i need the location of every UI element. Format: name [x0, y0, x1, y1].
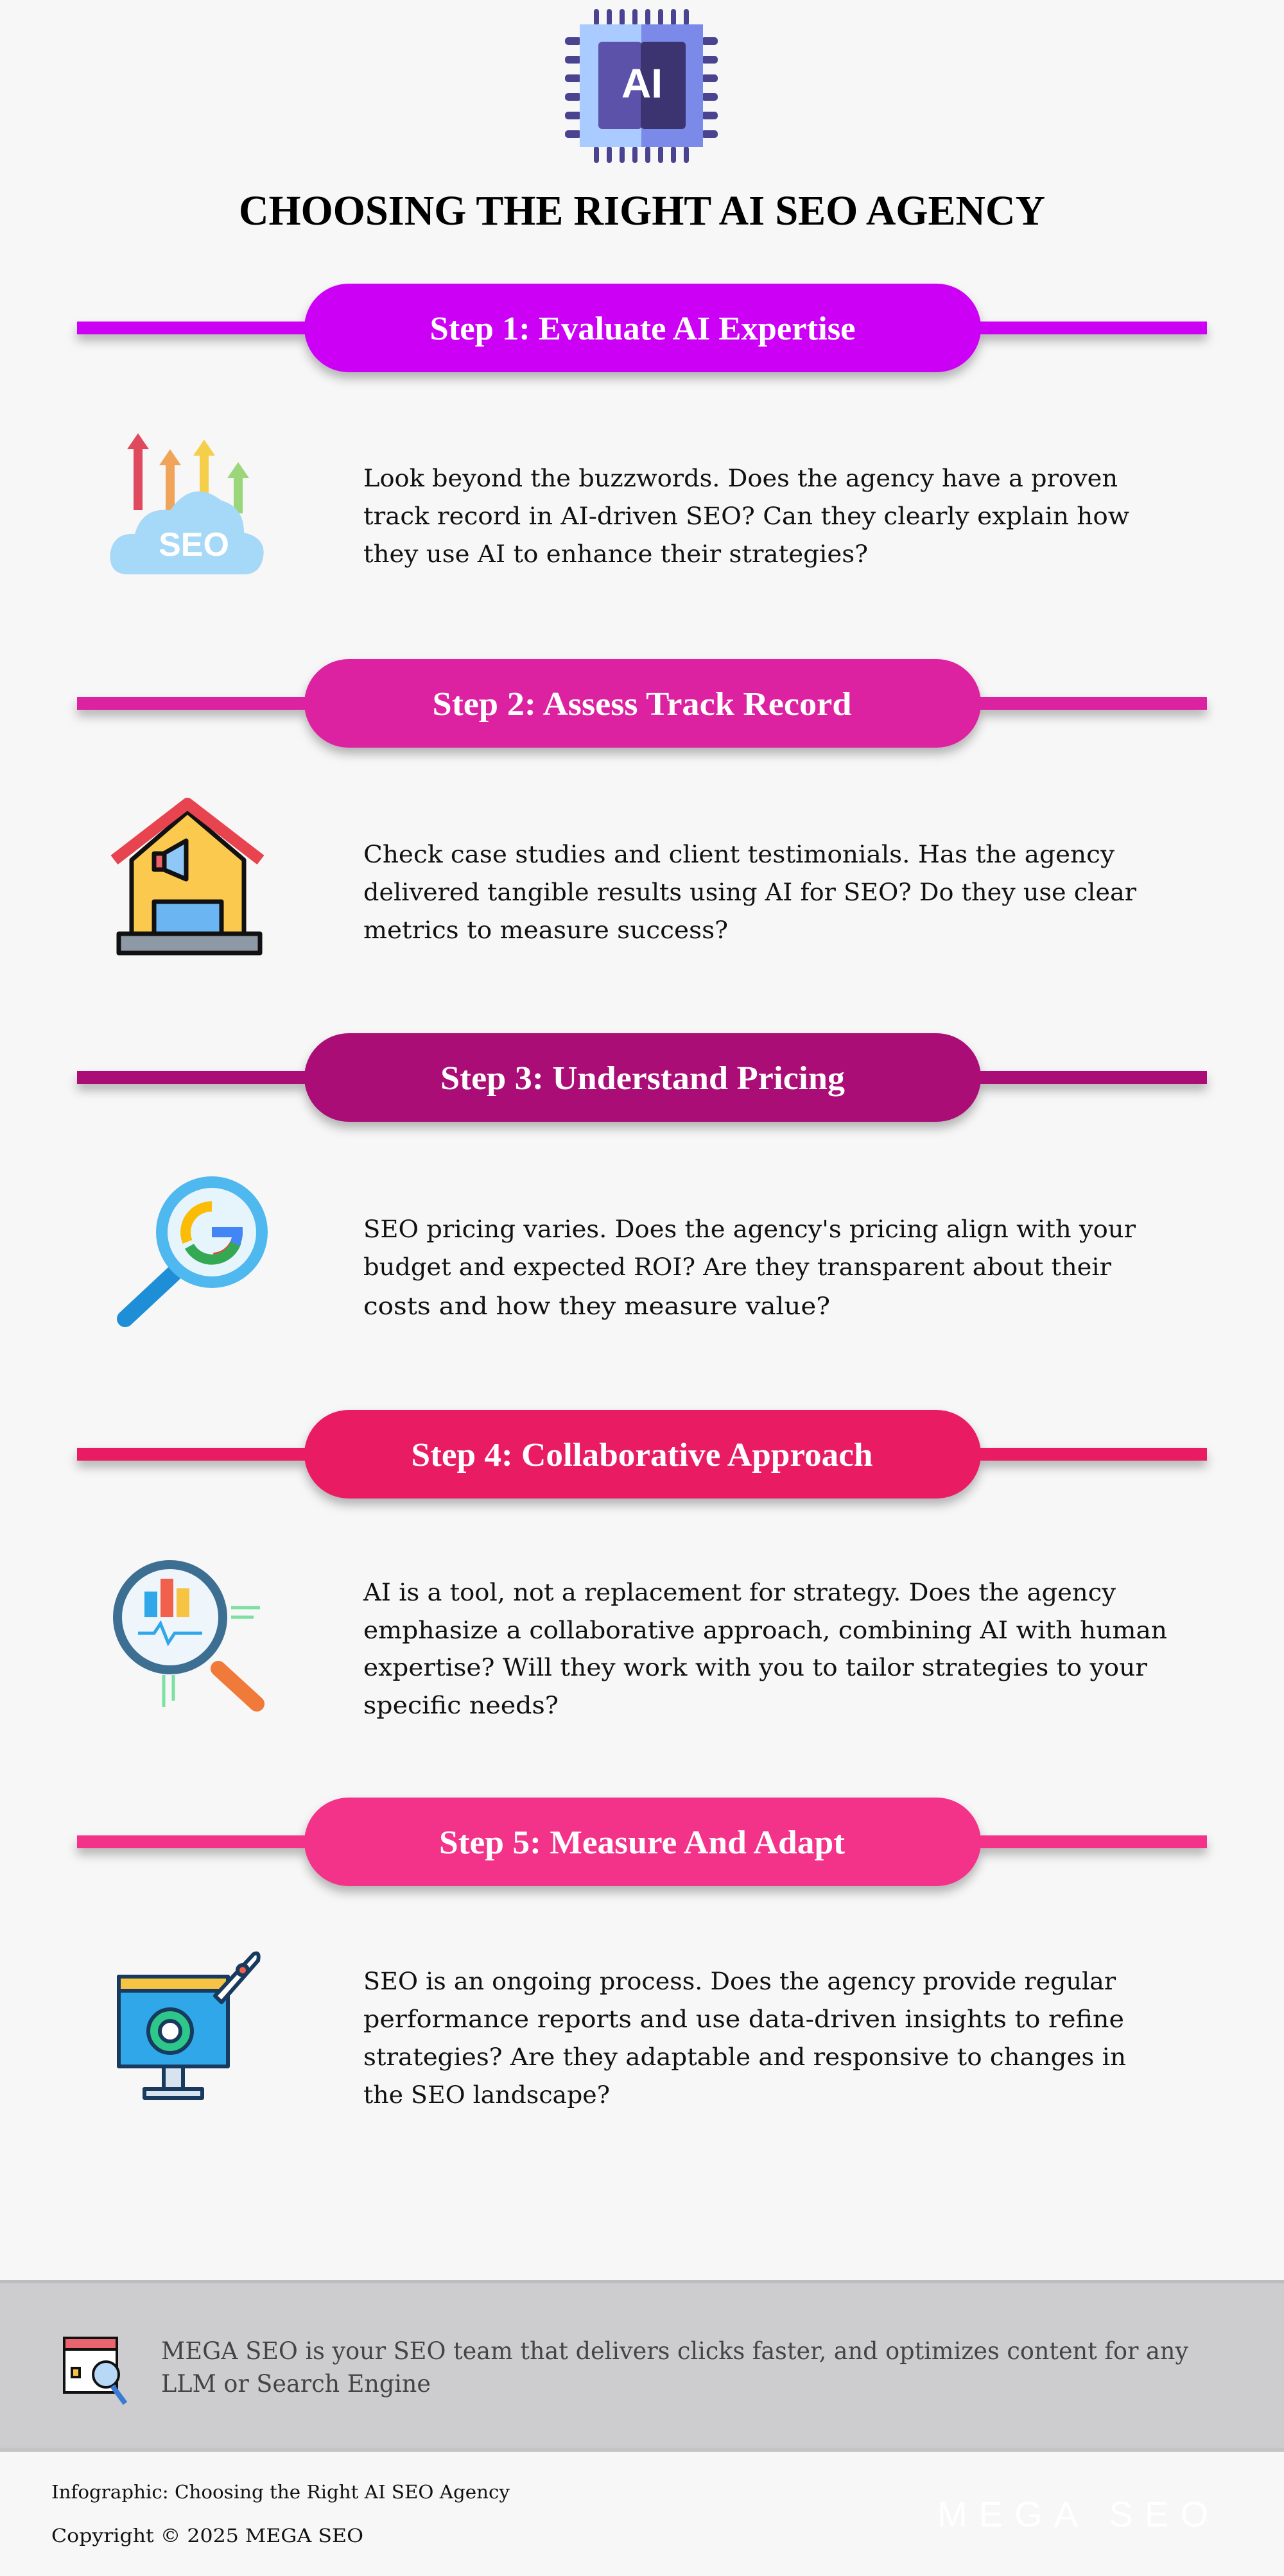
text: step 4: AI is a tool, not a replacement for strategy. Does the agency [363, 1579, 1116, 1606]
text: step 2: Check case studies and client testimonials. Has the agency [363, 841, 1115, 868]
text: step 5: the SEO landscape? [363, 2081, 610, 2109]
text: step 1: Look beyond the buzzwords. Does the agency have a proven [363, 465, 1118, 492]
step 3 header: Step 3: Understand Pricing [440, 1060, 845, 1097]
text: step 4: expertise? Will they work with you to tailor strategies to your [363, 1654, 1147, 1681]
text: step 3 [363, 1215, 1136, 1320]
text: step 2: metrics to measure success? [363, 916, 728, 944]
step 4 header [77, 1410, 1207, 1498]
text: step 3: SEO pricing varies. Does the agency's pricing align with your [363, 1215, 1136, 1243]
text: promo: MEGA SEO is your SEO team that delivers clicks faster, and optimizes content for any [161, 2337, 1188, 2365]
logo: MEGA SEO: MEGA SEO [937, 2494, 1208, 2534]
icon: AI chip: AI [621, 60, 663, 107]
text: step 4: specific needs? [363, 1692, 559, 1719]
step 3 header [77, 1033, 1207, 1122]
icon: SEO cloud: SEO [159, 526, 229, 563]
icon: analytics magnifier [117, 1565, 260, 1707]
text: step 5: performance reports and use data-driven insights to refine [363, 2005, 1124, 2033]
text: step 3: budget and expected ROI? Are they transparent about their [363, 1253, 1111, 1281]
text: step 2 [363, 841, 1136, 944]
footer credits: Infographic: Choosing the Right AI SEO Agency [51, 2481, 510, 2503]
step 5 header: Step 5: Measure And Adapt [439, 1825, 846, 1861]
text: step 1 [363, 465, 1129, 568]
text: promo: LLM or Search Engine [161, 2370, 431, 2398]
footer credits: Copyright © 2025 MEGA SEO [51, 2525, 363, 2546]
title: CHOOSING THE RIGHT AI SEO AGENCY [239, 187, 1045, 234]
text: step 5: SEO is an ongoing process. Does the agency provide regular [363, 1968, 1116, 1995]
icon: magnifier with G [125, 1182, 262, 1319]
step 2 header: Step 2: Assess Track Record [433, 686, 852, 723]
icon: house with megaphone [114, 803, 261, 953]
footer credits [51, 2481, 510, 2546]
text: step 4 [363, 1579, 1167, 1719]
icon: monitor with rocket [119, 1953, 259, 2098]
text: step 5 [363, 1968, 1126, 2109]
text: step 2: delivered tangible results using AI for SEO? Do they use clear [363, 879, 1136, 906]
text: step 4: emphasize a collaborative approach, combining AI with human [363, 1617, 1167, 1644]
icon: AI chip [565, 9, 718, 163]
step 5 header [77, 1798, 1207, 1886]
text: step 1: they use AI to enhance their strategies? [363, 540, 868, 568]
step 1 header [77, 284, 1207, 372]
step 1 header: Step 1: Evaluate AI Expertise [430, 311, 855, 347]
icon: SEO cloud [110, 433, 264, 574]
step 4 header: Step 4: Collaborative Approach [411, 1437, 873, 1473]
icon: browser with key magnifier [64, 2338, 125, 2403]
text: step 3: costs and how they measure value? [363, 1292, 830, 1320]
text: step 1: track record in AI-driven SEO? Can they clearly explain how [363, 502, 1129, 530]
panel: footer promo band [0, 2280, 1284, 2452]
text: promo [161, 2337, 1188, 2398]
text: step 5: strategies? Are they adaptable and responsive to changes in [363, 2043, 1126, 2071]
step 2 header [77, 659, 1207, 748]
